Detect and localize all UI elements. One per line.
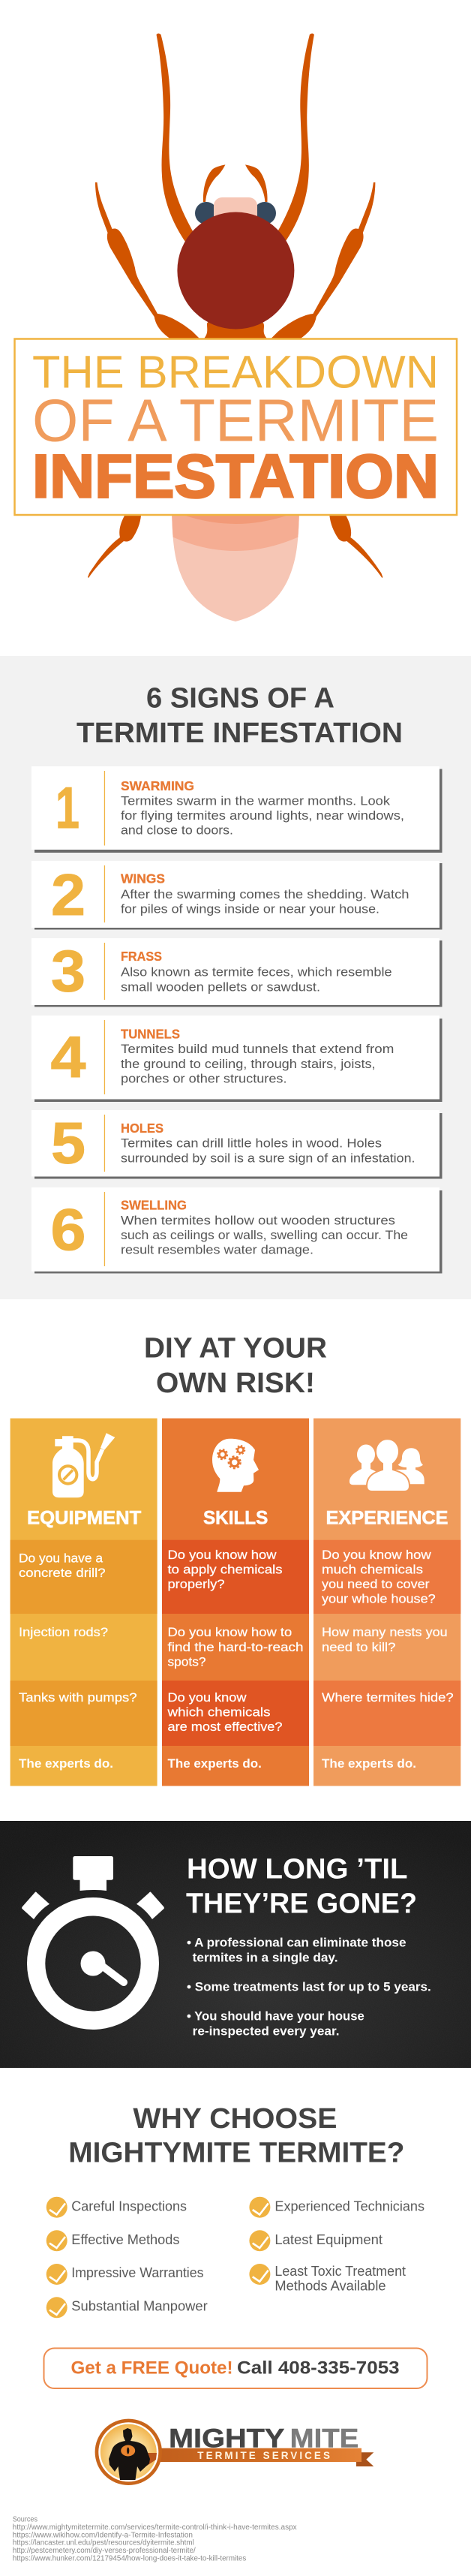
questions: skills: properly? bbox=[168, 1577, 225, 1591]
panel: 6 signs of a termite infestation bbox=[0, 656, 471, 1299]
label: skills: SKILLS bbox=[203, 1507, 268, 1528]
heading: how long: HOW LONG ’TIL bbox=[187, 1854, 408, 1885]
item: least toxic treatment: Methods Available bbox=[274, 2279, 386, 2294]
card 6: swelling bbox=[32, 1187, 442, 1273]
item: substantial manpower: Substantial Manpower bbox=[71, 2299, 208, 2314]
icon: stopwatch bbox=[22, 1856, 164, 2030]
card 4: tunnels: Termites build mud tunnels that extend from bbox=[121, 1042, 394, 1056]
heading: 6 signs: TERMITE INFESTATION bbox=[76, 718, 403, 749]
card 2: wings: for piles of wings inside or near your house. bbox=[121, 902, 380, 916]
questions: experience bbox=[322, 1548, 454, 1771]
head plate bbox=[214, 197, 257, 224]
heading: how long bbox=[186, 1854, 417, 1919]
logo badge bbox=[95, 2419, 162, 2485]
card 1: swarming: Termites swarm in the warmer months. Look bbox=[121, 794, 391, 808]
logo ribbon bbox=[160, 2448, 374, 2466]
icon: head with gears bbox=[212, 1439, 259, 1492]
right legs and antenna bbox=[245, 33, 382, 578]
card 6: swelling: 6 bbox=[51, 1196, 86, 1262]
sources: http://pestcemetery.com/diy-verses-professional-termite/ bbox=[13, 2547, 196, 2555]
item: experienced technicians: Experienced Technicians bbox=[274, 2199, 424, 2214]
heading: DIY at your own risk: DIY AT YOUR bbox=[144, 1332, 327, 1364]
item: impressive warranties: Impressive Warranties bbox=[71, 2265, 204, 2280]
card 1: swarming: and close to doors. bbox=[121, 823, 233, 838]
thorax bbox=[204, 321, 267, 339]
checklist: reasons bbox=[46, 2197, 424, 2318]
logo wordmark bbox=[169, 2424, 358, 2453]
item: experienced technicians bbox=[249, 2197, 424, 2218]
item: effective methods bbox=[46, 2230, 180, 2251]
bullet list bbox=[187, 1936, 431, 2038]
icon: sprayer bottle bbox=[52, 1433, 115, 1497]
bullet list: re-inspected every year. bbox=[193, 2024, 339, 2038]
card 5: holes: surrounded by soil is a sure sign of an infestation. bbox=[121, 1151, 416, 1165]
questions: experience: you need to cover bbox=[322, 1577, 430, 1591]
questions: skills: Do you know how to bbox=[168, 1625, 292, 1639]
card 1: swarming bbox=[32, 766, 442, 853]
column: skills bbox=[162, 1419, 309, 1786]
item: effective methods: Effective Methods bbox=[71, 2232, 180, 2247]
item: impressive warranties bbox=[46, 2264, 204, 2285]
card 4: tunnels: 4 bbox=[51, 1024, 86, 1090]
heading: why choose mightymite termite: WHY CHOOSE bbox=[133, 2103, 337, 2135]
head bbox=[177, 212, 294, 329]
questions: equipment: The experts do. bbox=[19, 1756, 113, 1771]
questions: skills: to apply chemicals bbox=[168, 1562, 282, 1576]
questions: skills: find the hard-to-reach bbox=[168, 1640, 303, 1654]
item: least toxic treatment bbox=[249, 2264, 406, 2294]
sources: http://www.mightymitetermite.com/services/termite-control/i-think-i-have-termites.aspx bbox=[13, 2523, 297, 2532]
questions: experience: Where termites hide? bbox=[322, 1690, 454, 1705]
card 5: holes bbox=[32, 1109, 442, 1178]
card 1: swarming: SWARMING bbox=[121, 778, 194, 793]
card 2: wings bbox=[32, 861, 442, 929]
title banner: OF A TERMITE bbox=[32, 387, 439, 454]
card 2: wings: WINGS bbox=[121, 871, 165, 886]
questions: experience: Do you know how bbox=[322, 1548, 431, 1562]
logo wordmark: MITE bbox=[290, 2424, 358, 2453]
eyes bbox=[195, 202, 276, 224]
card 3: frass: small wooden pellets or sawdust. bbox=[121, 980, 320, 994]
card 3: frass bbox=[32, 938, 442, 1007]
item: latest equipment bbox=[249, 2230, 382, 2251]
card 2: wings: 2 bbox=[51, 862, 86, 928]
questions: skills bbox=[166, 1548, 303, 1771]
panel: how long til they're gone bbox=[0, 1821, 471, 2068]
bullet list: • You should have your house bbox=[187, 2009, 364, 2024]
card 3: frass: FRASS bbox=[121, 949, 162, 964]
heading: why choose mightymite termite: MIGHTYMITE TERMITE? bbox=[68, 2138, 405, 2169]
questions: equipment: Do you have a bbox=[19, 1551, 104, 1566]
item: least toxic treatment: Least Toxic Treatment bbox=[274, 2264, 406, 2279]
abdomen bbox=[172, 516, 299, 621]
card 4: tunnels bbox=[32, 1016, 442, 1102]
questions: skills: spots? bbox=[168, 1655, 206, 1669]
call to action button: Get a FREE Quote! bbox=[70, 2358, 232, 2379]
sources: Sources bbox=[13, 2515, 38, 2523]
icon: three people bbox=[350, 1439, 424, 1491]
bullet list: • Some treatments last for up to 5 years. bbox=[187, 1979, 431, 1994]
card 6: swelling: such as ceilings or walls, swelling can occur. The bbox=[121, 1228, 408, 1242]
column: experience bbox=[314, 1419, 460, 1786]
questions: equipment bbox=[19, 1551, 137, 1771]
card 1: swarming: for flying termites around lights, near windows, bbox=[121, 808, 404, 823]
title banner: INFESTATION bbox=[32, 443, 439, 510]
heading: why choose mightymite termite bbox=[68, 2103, 405, 2169]
card 6: swelling: result resembles water damage. bbox=[121, 1243, 314, 1256]
logo ribbon: TERMITE SERVICES bbox=[197, 2450, 330, 2461]
questions: equipment: Tanks with pumps? bbox=[19, 1690, 137, 1705]
card 4: tunnels: the ground to ceiling, through stairs, joists, bbox=[121, 1057, 376, 1071]
column: equipment bbox=[10, 1419, 158, 1786]
questions: skills: which chemicals bbox=[166, 1705, 270, 1719]
left legs and antenna bbox=[88, 33, 225, 578]
sources: https://lancaster.unl.edu/pest/resources/dyitermite.shtml bbox=[13, 2539, 194, 2547]
call to action button bbox=[44, 2348, 428, 2388]
sources: https://www.hunker.com/12179454/how-long-does-it-take-to-kill-termites bbox=[13, 2555, 246, 2563]
card 3: frass: 3 bbox=[51, 938, 86, 1004]
questions: experience: The experts do. bbox=[322, 1756, 416, 1771]
item: substantial manpower bbox=[46, 2297, 208, 2318]
item: latest equipment: Latest Equipment bbox=[274, 2232, 382, 2247]
call to action button: Call 408-335-7053 bbox=[237, 2358, 400, 2379]
questions: skills: are most effective? bbox=[168, 1720, 282, 1734]
card 5: holes: HOLES bbox=[121, 1121, 164, 1136]
card 2: wings: After the swarming comes the shedding. Watch bbox=[121, 887, 410, 901]
sources: https://www.wikihow.com/Identify-a-Termite-Infestation bbox=[13, 2532, 193, 2540]
questions: skills: Do you know bbox=[168, 1690, 247, 1705]
hero: termite illustration and title bbox=[15, 33, 457, 623]
heading: 6 signs: 6 SIGNS OF A bbox=[146, 683, 334, 715]
card 5: holes: Termites can drill little holes in wood. Holes bbox=[121, 1136, 382, 1150]
item: careful inspections bbox=[46, 2197, 187, 2218]
card 6: swelling: When termites hollow out wooden structures bbox=[121, 1213, 395, 1228]
card 4: tunnels: porches or other structures. bbox=[121, 1072, 286, 1085]
bullet list: • A professional can eliminate those bbox=[187, 1936, 406, 1950]
questions: equipment: concrete drill? bbox=[19, 1566, 106, 1580]
heading: how long: THEY’RE GONE? bbox=[186, 1888, 417, 1919]
card 5: holes: 5 bbox=[51, 1109, 86, 1175]
termite illustration bbox=[88, 33, 382, 623]
questions: skills: Do you know how bbox=[168, 1548, 277, 1562]
card 4: tunnels: TUNNELS bbox=[121, 1027, 180, 1042]
logo wordmark: MIGHTY bbox=[169, 2424, 284, 2453]
card 1: swarming: 1 bbox=[56, 775, 80, 841]
card 3: frass: Also known as termite feces, which resemble bbox=[121, 965, 392, 979]
heading: 6 signs bbox=[76, 683, 403, 749]
heading: DIY at your own risk bbox=[144, 1332, 327, 1399]
bullet list: termites in a single day. bbox=[193, 1950, 338, 1964]
sources bbox=[13, 2515, 297, 2563]
questions: experience: your whole house? bbox=[322, 1592, 436, 1606]
item: careful inspections: Careful Inspections bbox=[71, 2199, 187, 2214]
logo: mightymite termite services bbox=[95, 2419, 374, 2485]
questions: skills: The experts do. bbox=[168, 1756, 262, 1771]
questions: equipment: Injection rods? bbox=[19, 1625, 108, 1639]
heading: DIY at your own risk: OWN RISK! bbox=[156, 1368, 315, 1399]
questions: experience: need to kill? bbox=[322, 1640, 395, 1654]
questions: experience: How many nests you bbox=[322, 1625, 448, 1639]
title banner bbox=[15, 339, 457, 515]
questions: experience: much chemicals bbox=[322, 1562, 423, 1576]
label: equipment: EQUIPMENT bbox=[27, 1507, 141, 1528]
label: experience: EXPERIENCE bbox=[326, 1507, 448, 1528]
card 6: swelling: SWELLING bbox=[121, 1197, 187, 1212]
title banner: THE BREAKDOWN bbox=[32, 347, 439, 398]
